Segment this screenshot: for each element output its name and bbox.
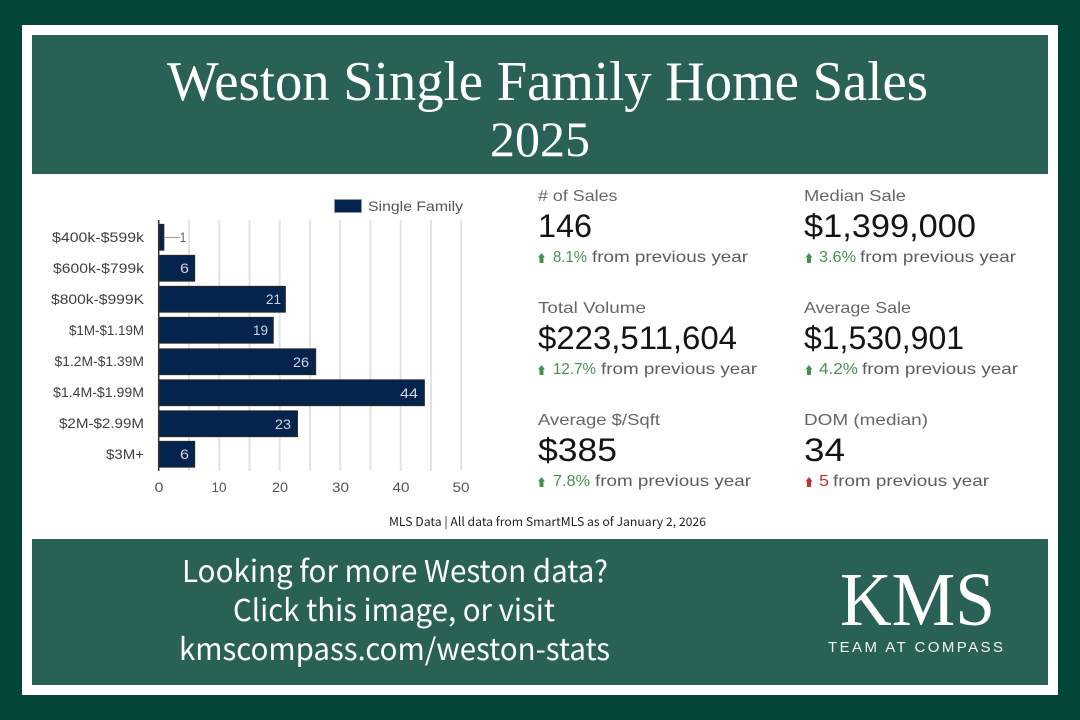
bar value labels: 21 [266, 291, 281, 307]
stat: total volume: 12.7% [553, 361, 596, 378]
stat: average price per sqft: Average $/Sqft [538, 412, 661, 429]
stat: number of sales: 146 [538, 208, 592, 244]
stat: total volume [538, 300, 758, 378]
bar value labels: 26 [293, 354, 309, 370]
x axis labels: 0 [154, 479, 164, 495]
category labels: $600k-$799k [53, 260, 145, 276]
stat: number of sales: # of Sales [538, 188, 618, 205]
stat: median sale: 3.6% [819, 249, 856, 266]
x axis labels: 20 [272, 479, 288, 495]
category labels [51, 229, 145, 462]
bar value labels: 1 [180, 229, 186, 245]
stat: total volume: $223,511,604 [538, 320, 737, 356]
call to action: Looking for more Weston data? [182, 547, 608, 591]
stat: average sale: Average Sale [804, 300, 911, 317]
legend [334, 198, 463, 214]
bar value labels: 6 [180, 446, 189, 462]
category labels: $1.4M-$1.99M [53, 384, 144, 400]
stat: median sale [804, 188, 1017, 266]
call to action [179, 547, 610, 669]
bar chart: single family sales by price range [51, 198, 470, 495]
data source note: MLS Data | All data from SmartMLS as of January 2, 2026 [389, 513, 706, 530]
category labels: $2M-$2.99M [59, 415, 144, 431]
stat: median sale: $1,399,000 [804, 208, 976, 244]
x axis labels: 10 [212, 479, 227, 495]
logo: KMS team at Compass: TEAM AT COMPASS [828, 639, 1003, 656]
stat: total volume: from previous year [601, 361, 758, 378]
stat: average price per sqft: 7.8% [553, 473, 590, 490]
title: Weston Single Family Home Sales [167, 51, 928, 113]
x axis labels: 40 [392, 479, 410, 495]
stat: average sale: from previous year [862, 361, 1019, 378]
stat: average sale: 4.2% [819, 361, 858, 378]
footer banner [32, 539, 1048, 685]
stat: days on market: 5 [819, 473, 829, 490]
stat: average sale [804, 300, 1019, 378]
stat: average price per sqft: $385 [538, 432, 617, 468]
x axis labels: 30 [332, 479, 349, 495]
stat: median sale: Median Sale [804, 188, 906, 205]
bars [159, 224, 424, 467]
stat: number of sales: from previous year [592, 249, 749, 266]
category labels: $1M-$1.19M [69, 322, 144, 338]
x axis labels: 50 [452, 479, 470, 495]
bar value labels: 19 [253, 322, 268, 338]
category labels: $800k-$999K [51, 291, 145, 307]
stat: number of sales [538, 188, 749, 266]
bar value labels: 23 [275, 416, 291, 432]
stat: number of sales: 8.1% [553, 249, 587, 266]
category labels: $1.2M-$1.39M [54, 353, 144, 369]
category labels: $3M+ [106, 446, 144, 462]
stat: days on market: DOM (median) [804, 412, 928, 429]
year: 2025 [490, 111, 590, 167]
header banner [32, 35, 1048, 174]
stat: days on market [804, 412, 990, 490]
bar value labels [180, 229, 418, 462]
stat: total volume: Total Volume [538, 300, 646, 317]
bar value labels: 6 [180, 260, 189, 276]
call to action: kmscompass.com/weston-stats [179, 625, 610, 669]
legend: Single Family [368, 198, 463, 214]
stat: average sale: $1,530,901 [804, 320, 964, 356]
stat: days on market: from previous year [833, 473, 990, 490]
stat: average price per sqft [538, 412, 752, 490]
stat: days on market: 34 [804, 432, 845, 468]
stat: average price per sqft: from previous year [595, 473, 752, 490]
stat: median sale: from previous year [860, 249, 1017, 266]
category labels: $400k-$599k [52, 229, 145, 245]
logo: KMS team at Compass: KMS [840, 558, 995, 642]
call to action: Click this image, or visit [233, 586, 555, 630]
x axis labels [154, 479, 470, 495]
bar value labels: 44 [400, 385, 418, 401]
